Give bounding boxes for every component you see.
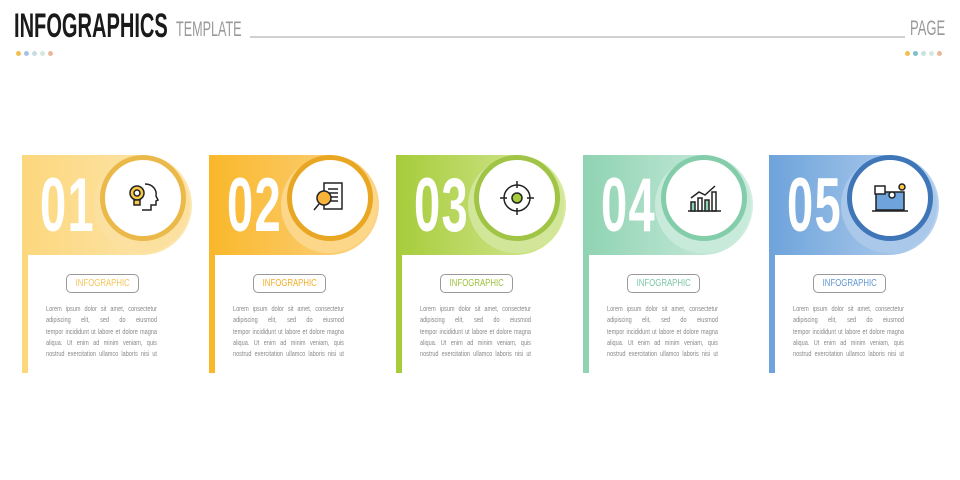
text: adipiscing elit, sed do eiusmod bbox=[607, 315, 718, 324]
text: nostrud exercitation ullamco laboris nisi ut bbox=[793, 349, 904, 358]
label: INFOGRAPHIC bbox=[636, 278, 691, 289]
text: Lorem ipsum dolor sit amet, consectetur bbox=[233, 304, 344, 313]
text: tempor incididunt ut labore et dolore magna bbox=[233, 327, 344, 336]
label bbox=[253, 274, 326, 293]
text: aliqua. Ut enim ad minim veniam, quis bbox=[420, 338, 531, 347]
text: Lorem ipsum dolor sit amet, consectetur bbox=[420, 304, 531, 313]
text: nostrud exercitation ullamco laboris nisi ut bbox=[420, 349, 531, 358]
number 04: 04 bbox=[601, 163, 656, 248]
text: nostrud exercitation ullamco laboris nisi ut bbox=[233, 349, 344, 358]
card 03 bbox=[396, 155, 566, 373]
text: aliqua. Ut enim ad minim veniam, quis bbox=[607, 338, 718, 347]
icon: target gear bbox=[474, 155, 560, 241]
card 04 bbox=[583, 155, 753, 373]
number 03: 03 bbox=[414, 163, 469, 248]
text: adipiscing elit, sed do eiusmod bbox=[793, 315, 904, 324]
text: Lorem ipsum dolor sit amet, consectetur bbox=[607, 304, 718, 313]
icon: document magnifier bbox=[287, 155, 373, 241]
text: nostrud exercitation ullamco laboris nisi ut bbox=[46, 349, 157, 358]
text: adipiscing elit, sed do eiusmod bbox=[233, 315, 344, 324]
text: Lorem ipsum dolor sit amet, consectetur bbox=[46, 304, 157, 313]
text: tempor incididunt ut labore et dolore magna bbox=[793, 327, 904, 336]
title: INFOGRAPHICS bbox=[14, 7, 168, 45]
icon: bar chart bbox=[661, 155, 747, 241]
text bbox=[793, 304, 904, 358]
label bbox=[627, 274, 700, 293]
text bbox=[233, 304, 344, 358]
card 05 bbox=[769, 155, 939, 373]
label bbox=[66, 274, 139, 293]
number 01: 01 bbox=[40, 163, 95, 248]
text: adipiscing elit, sed do eiusmod bbox=[420, 315, 531, 324]
card 01 bbox=[22, 155, 192, 373]
text: aliqua. Ut enim ad minim veniam, quis bbox=[233, 338, 344, 347]
text: tempor incididunt ut labore et dolore magna bbox=[607, 327, 718, 336]
label: INFOGRAPHIC bbox=[262, 278, 317, 289]
number 05: 05 bbox=[787, 163, 842, 248]
text: tempor incididunt ut labore et dolore magna bbox=[46, 327, 157, 336]
page label: PAGE bbox=[910, 17, 945, 40]
text bbox=[420, 304, 531, 358]
text: Lorem ipsum dolor sit amet, consectetur bbox=[793, 304, 904, 313]
text: aliqua. Ut enim ad minim veniam, quis bbox=[793, 338, 904, 347]
icon: head with lightbulb bbox=[100, 155, 186, 241]
dots right bbox=[905, 51, 942, 56]
dots left bbox=[16, 51, 53, 56]
text: nostrud exercitation ullamco laboris nisi ut bbox=[607, 349, 718, 358]
text: tempor incididunt ut labore et dolore magna bbox=[420, 327, 531, 336]
label: INFOGRAPHIC bbox=[75, 278, 130, 289]
text: aliqua. Ut enim ad minim veniam, quis bbox=[46, 338, 157, 347]
text: adipiscing elit, sed do eiusmod bbox=[46, 315, 157, 324]
icon: laptop presenter bbox=[847, 155, 933, 241]
label bbox=[440, 274, 513, 293]
label: INFOGRAPHIC bbox=[822, 278, 877, 289]
text bbox=[46, 304, 157, 358]
number 02: 02 bbox=[227, 163, 282, 248]
label bbox=[813, 274, 886, 293]
text bbox=[607, 304, 718, 358]
subtitle: TEMPLATE bbox=[176, 18, 242, 41]
card 02 bbox=[209, 155, 379, 373]
label: INFOGRAPHIC bbox=[449, 278, 504, 289]
